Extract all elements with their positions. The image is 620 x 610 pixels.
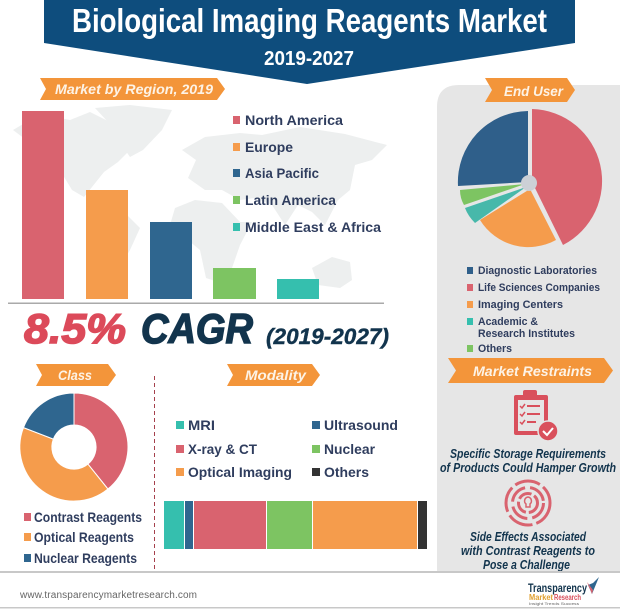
legend: end user [467,265,600,355]
legend: class: Contrast Reagents [34,509,142,525]
ribbon: market by region [40,78,225,100]
legend: end user: Imaging Centers [478,299,563,311]
logo: transparency market research: Transparency [528,581,587,595]
ribbon: modality: Modality [245,367,307,383]
legend: class: Nuclear Reagents [34,550,137,566]
stacked bar: modality [164,501,427,549]
legend: modality: Ultrasound [324,417,398,433]
legend: region: Middle East & Africa [245,219,381,235]
legend: region: Latin America [245,192,336,208]
legend: modality [176,417,398,480]
legend: region: North America [245,112,343,128]
legend: region: Europe [245,139,293,155]
legend: modality: Nuclear [324,441,376,457]
CAGR callout: 8.5% [24,305,126,352]
icon: clipboard checklist [514,390,558,441]
text: restraint one [440,447,616,475]
legend: class [24,509,142,566]
legend: modality: Optical Imaging [188,464,292,480]
legend: end user: Others [478,343,512,355]
ribbon: market by region: Market by Region, 2019 [55,81,213,97]
legend: region [233,112,381,235]
legend: end user: Academic & [478,316,538,328]
bar chart: market by region [8,111,384,304]
ribbon: class: Class [58,367,92,383]
legend: modality: MRI [188,417,215,433]
logo: transparency market research [528,577,599,606]
CAGR callout: (2019-2027) [266,324,389,349]
CAGR callout [24,305,389,352]
logo: transparency market research: Insight Trends Success [529,602,579,606]
text: restraint two [461,530,595,572]
ribbon: class [36,364,116,386]
logo: transparency market research: Market [529,593,553,602]
text: restraint two: with Contrast Reagents to [461,544,595,558]
text: restraint two: Pose a Challenge [483,558,570,572]
subtitle years: 2019-2027 [264,48,354,70]
legend: end user: Life Sciences Companies [478,282,600,294]
world map backdrop [13,105,387,293]
logo: transparency market research: Research [554,593,581,602]
ribbon: market restraints: Market Restraints [473,363,592,379]
icon: maze with light bulb [506,481,550,525]
ribbon: end user: End User [504,83,564,99]
legend: end user: Diagnostic Laboratories [478,265,597,277]
website url: www.transparencymarketresearch.com [19,590,197,601]
text: restraint two: Side Effects Associated [470,530,586,544]
ribbon: modality [227,364,320,386]
ribbon: end user [485,78,575,102]
legend: class: Optical Reagents [34,529,134,545]
legend: modality: Others [324,464,369,480]
right panel background [437,85,620,571]
CAGR callout: CAGR [141,305,254,352]
legend: end user: Research Institutes [478,328,575,340]
pie chart: end user [458,109,602,247]
donut chart: class [20,393,128,501]
legend: region: Asia Pacific [245,165,319,181]
legend: modality: X-ray & CT [188,441,257,457]
ribbon: market restraints [448,358,613,383]
header banner [44,0,575,84]
